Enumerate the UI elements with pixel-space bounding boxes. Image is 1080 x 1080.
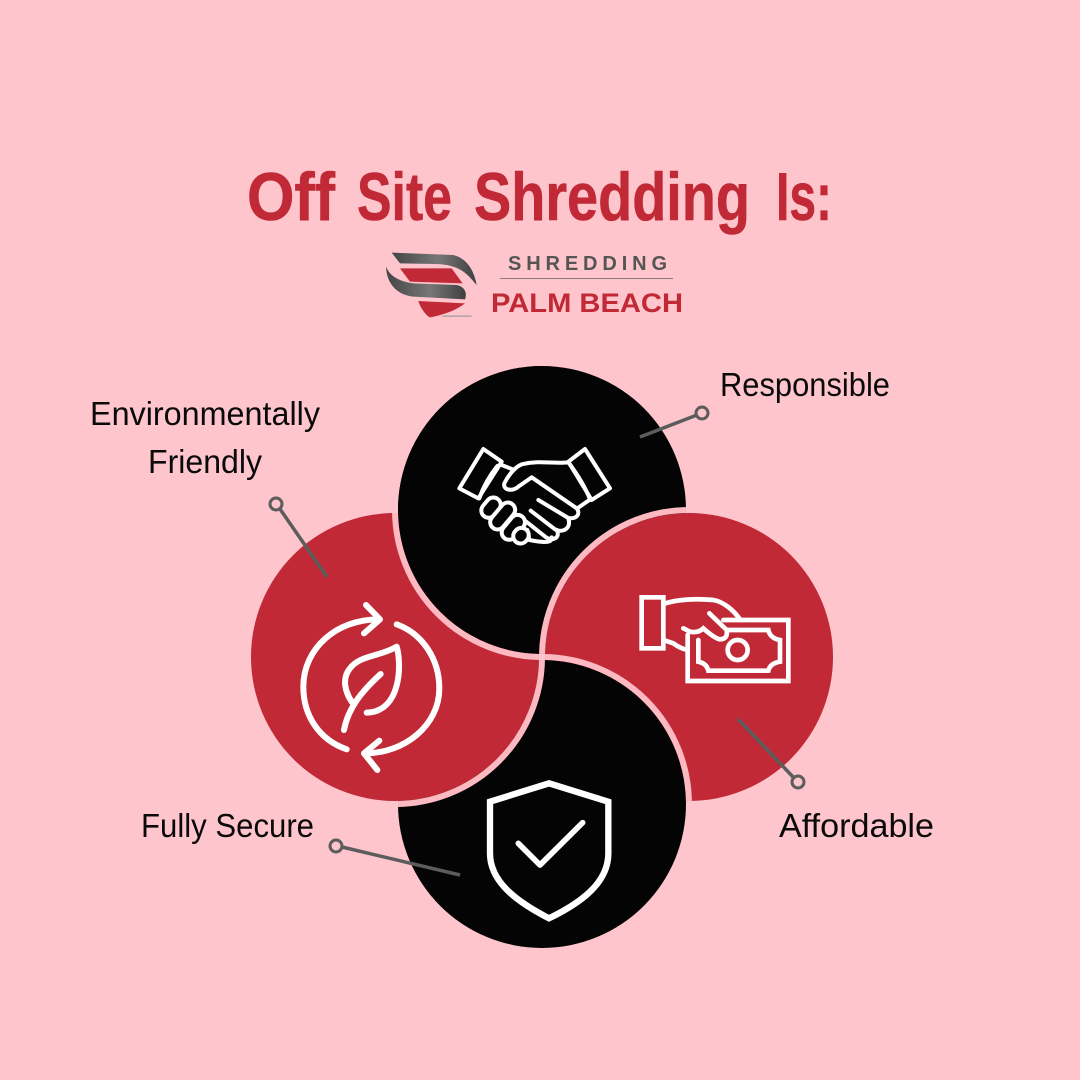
label: environmentally friendly: [90, 395, 320, 480]
title: Is:: [776, 159, 832, 235]
connector: affordable: [738, 719, 804, 788]
circle: right red: [545, 513, 833, 801]
title: Shredding: [474, 159, 750, 235]
logo text: shredding: SHREDDING: [508, 253, 667, 275]
circle: top black overlap: [398, 366, 541, 654]
icon: recycle leaf: [303, 605, 439, 770]
title: Off: [247, 159, 335, 235]
icon: hand with banknote: [642, 597, 788, 681]
connector: environmentally friendly: [270, 498, 327, 577]
circle: left red: [251, 513, 539, 801]
label: responsible: Responsible: [720, 366, 890, 403]
title: Site: [357, 159, 452, 235]
pinwheel diagram: [248, 363, 836, 951]
label: affordable: Affordable: [779, 807, 934, 844]
logo mark: [386, 253, 477, 317]
connector: fully secure: [330, 840, 460, 875]
connector: responsible: [640, 407, 708, 437]
logo: Shredding Palm Beach: [386, 253, 683, 318]
label: environmentally friendly: Friendly: [148, 443, 262, 480]
logo text: palm beach: PALM BEACH: [491, 288, 683, 318]
title: [247, 159, 832, 235]
icon: shield with check: [490, 783, 608, 918]
circle: top black: [398, 366, 686, 654]
label: environmentally friendly: Environmentally: [90, 395, 320, 432]
label: fully secure: Fully Secure: [141, 807, 314, 844]
ring: right red over top black: [539, 507, 686, 654]
circle: bottom black: [398, 660, 686, 948]
icon: handshake: [459, 449, 610, 547]
